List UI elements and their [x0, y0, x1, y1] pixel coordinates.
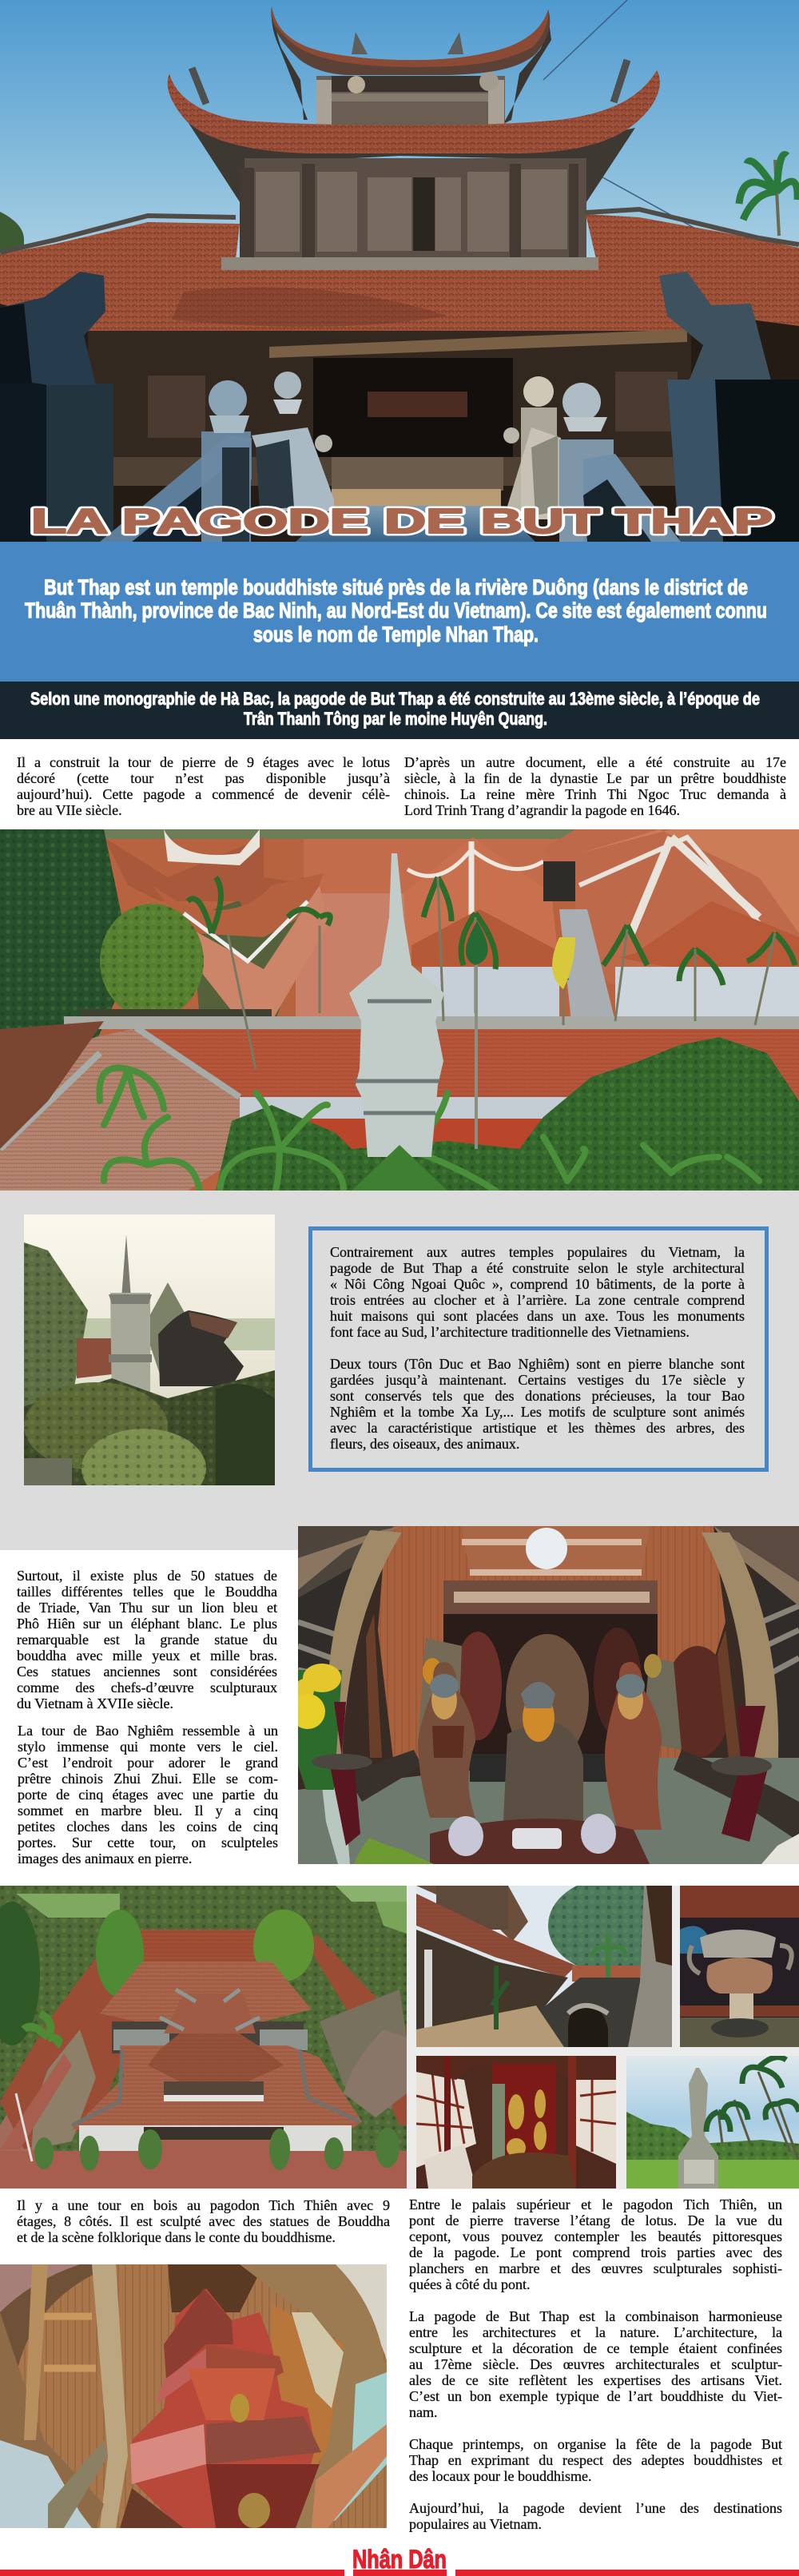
title: LA PAGODE DE BUT THAP — [31, 502, 773, 541]
text block: Bao Nghiem tower: stylo immense qui monte vers le ciel. — [18, 1739, 278, 1755]
text block: two towers: gardées jusqu’à maintenant. Certains vestiges du 17e siècle y — [330, 1372, 745, 1388]
text block: stone bridge — [409, 2196, 782, 2292]
aerial photo: temple courtyard and tower — [0, 829, 799, 1191]
text block: harmony with nature: La pagode de But Thap est la combinaison harmonieuse — [409, 2308, 782, 2324]
title: LA PAGODE DE BUT THAP — [31, 502, 773, 541]
text block: stone bridge: de la pagode. Le pont comprend trois parties avec des — [409, 2244, 782, 2260]
text block: architecture — [330, 1244, 745, 1340]
history band: dark: Trân Thanh Tông par le moine Huyên Quang. — [244, 709, 547, 729]
text block: architecture: trois entrées au clocher et à l’arrière. La zone centrale comprend — [330, 1292, 745, 1308]
text block: stone tower: bre au VIIe siècle. — [17, 802, 122, 818]
photo: wooden tower interior fisheye — [0, 2264, 387, 2528]
text block: two towers — [330, 1356, 745, 1452]
text block: Bao Nghiem tower: petites cloches dans les coins de cinq — [18, 1819, 278, 1835]
text block: statues — [17, 1568, 277, 1711]
text block: Bao Nghiem tower: images des animaux en pierre. — [18, 1851, 192, 1866]
photo: pagoda tower and palms — [626, 2056, 799, 2188]
intro band: blue: sous le nom de Temple Nhan Thap. — [253, 622, 539, 646]
photo: carved red pillar — [416, 2056, 616, 2188]
text block: harmony with nature: sculpture et la décoration de ce temple étaient confinées — [409, 2340, 782, 2356]
grey panel — [0, 1191, 799, 1550]
text block: architecture: Contrairement aux autres temples populaires du Vietnam, la — [330, 1244, 745, 1260]
title — [30, 502, 775, 541]
photo: altar with Buddha statues — [298, 1526, 799, 1864]
text block: harmony with nature — [409, 2308, 782, 2420]
text block: Bao Nghiem tower: La tour de Bao Nghiêm ressemble à un — [18, 1723, 278, 1739]
text block: architecture: font face au Sud, l’architecture traditionnelle des Vietnamiens. — [330, 1324, 690, 1340]
text block: statues: remarquable est la grande statue du — [17, 1632, 277, 1648]
text block: today: populaires au Vietnam. — [409, 2516, 542, 2532]
text block: wooden tower — [17, 2197, 390, 2245]
text block: harmony with nature: au 17ème siècle. Des œuvres architecturales et sculptur- — [409, 2356, 782, 2372]
text block: stone bridge: pont de pierre traverse l’étang de lotus. De la vue du — [409, 2212, 782, 2228]
text block: statues: tailles différentes telles que le Bouddha — [17, 1584, 277, 1600]
text block: Bao Nghiem tower: sommet en marbre bleu. Il y a cinq — [18, 1803, 278, 1819]
text block: stone tower: Il a construit la tour de pierre de 9 étages avec le lotus — [17, 754, 390, 770]
text block: Bao Nghiem tower: portes. Sur cette tour, on sculpteles — [18, 1835, 278, 1851]
text block: Bao Nghiem tower — [18, 1723, 278, 1866]
text block: statues: bouddha avec mille yeux et mille bras. — [17, 1648, 277, 1664]
text block: stone bridge: cepont, vous pouvez contempler les beautés pittoresques — [409, 2228, 782, 2244]
text block: two towers: avec la caractéristique artistique et les thèmes des arbres, des — [330, 1420, 745, 1436]
text block: statues: Ces statues anciennes sont considérées — [17, 1664, 277, 1680]
text block: two towers: Nghiêm et la tombe Xa Ly,... Les motifs de sculpture sont animés — [330, 1404, 745, 1420]
intro band: blue — [0, 542, 799, 682]
text block: stone bridge: planchers en marbre et des œuvres sculpturales sophisti- — [409, 2260, 782, 2276]
grey grid panel background — [407, 1886, 799, 2189]
callout box — [308, 1226, 769, 1472]
text block: stone bridge: quées à côté du pont. — [409, 2276, 530, 2292]
text block: architecture: « Nôi Công Ngoai Quôc », comprend 10 bâtiments, de la porte à — [330, 1276, 745, 1292]
text block: statues: de Triade, Van Thu sur un lion bleu et — [17, 1600, 277, 1616]
photo: incense burner — [680, 1886, 799, 2047]
text block: today: Aujourd’hui, la pagode devient l’une des destinations — [409, 2500, 782, 2516]
history band: dark — [0, 682, 799, 739]
text block: spring festival: Chaque printemps, on organise la fête de la pagode But — [409, 2436, 782, 2452]
text block: Bao Nghiem tower: C’est l’endroit pour adorer le grand — [18, 1755, 278, 1771]
text block: other document: chinois. La reine mère Trinh Thi Ngoc Truc demanda à — [404, 786, 786, 802]
aerial photo: temple roofs — [0, 1886, 407, 2188]
text block: Bao Nghiem tower: porte de cinq étages avec une partie du — [18, 1787, 278, 1803]
text block: statues: Phô Hiên sur un éléphant blanc. Le plus — [17, 1616, 277, 1632]
text block: spring festival: Thap en exprimant du respect des adeptes bouddhistes et — [409, 2452, 782, 2468]
text block: wooden tower: étages, 8 côtés. Il est sculpté avec des statues de Bouddha — [17, 2213, 390, 2229]
text block: two towers: Deux tours (Tôn Duc et Bao Nghiêm) sont en pierre blanche sont — [330, 1356, 745, 1372]
text block: other document: Lord Trinh Trang d’agrandir la pagode en 1646. — [404, 802, 680, 818]
text block: wooden tower: Il y a une tour en bois au pagodon Tich Thiên avec 9 — [17, 2197, 390, 2213]
text block: wooden tower: et de la scène folklorique dans le conte du bouddhisme. — [17, 2229, 336, 2245]
text block: other document: siècle, à la fin de la dynastie Le par un prêtre bouddhiste — [404, 770, 786, 786]
text block: statues: comme des chefs-d’œuvre sculpturaux — [17, 1680, 277, 1695]
hero photo: pagoda facade — [0, 0, 799, 542]
text block: stone tower: aujourd’hui). Cette pagode a commencé de devenir célè- — [17, 786, 390, 802]
text block: other document — [404, 754, 786, 818]
text block: statues: Surtout, il existe plus de 50 statues de — [17, 1568, 277, 1584]
text block: harmony with nature: entre les architectures et la nature. L’architecture, la — [409, 2324, 782, 2340]
text block: two towers: fleurs, des oiseaux, des animaux. — [330, 1436, 519, 1452]
text block: two towers: sont conservés tels que des donations précieuses, la tour Bao — [330, 1388, 745, 1404]
text block: Bao Nghiem tower: prêtre chinois Zhui Zhui. Elle se com- — [18, 1771, 278, 1787]
photo: stone bridge — [416, 1886, 672, 2047]
photo: stone tower among trees — [24, 1214, 275, 1485]
text block: spring festival: des locaux pour le bouddhisme. — [409, 2468, 591, 2484]
text block: spring festival — [409, 2436, 782, 2484]
text block: today — [409, 2500, 782, 2532]
text block: architecture: huit maisons qui sont placées dans un axe. Tous les monuments — [330, 1308, 745, 1324]
text block: stone tower — [17, 754, 390, 818]
text block: harmony with nature: nam. — [409, 2404, 438, 2420]
text block: harmony with nature: ales de ce site reflètent les expertises des artisans Viet. — [409, 2372, 782, 2388]
text block: stone bridge: Entre le palais supérieur et le pagodon Tich Thiên, un — [409, 2196, 782, 2212]
text block: statues: du Vietnam à XVIIe siècle. — [17, 1695, 173, 1711]
text block: stone tower: décoré (cette tour n’est pas disponible jusqu’à — [17, 770, 390, 786]
text block: other document: D’après un autre document, elle a été construite au 17e — [404, 754, 786, 770]
text block: architecture: pagode de But Thap a été construite selon le style architectural — [330, 1260, 745, 1276]
text block: harmony with nature: C’est un bon exemple typique de l’art bouddhiste du Viet- — [409, 2388, 782, 2404]
footer red bar — [0, 2570, 799, 2576]
